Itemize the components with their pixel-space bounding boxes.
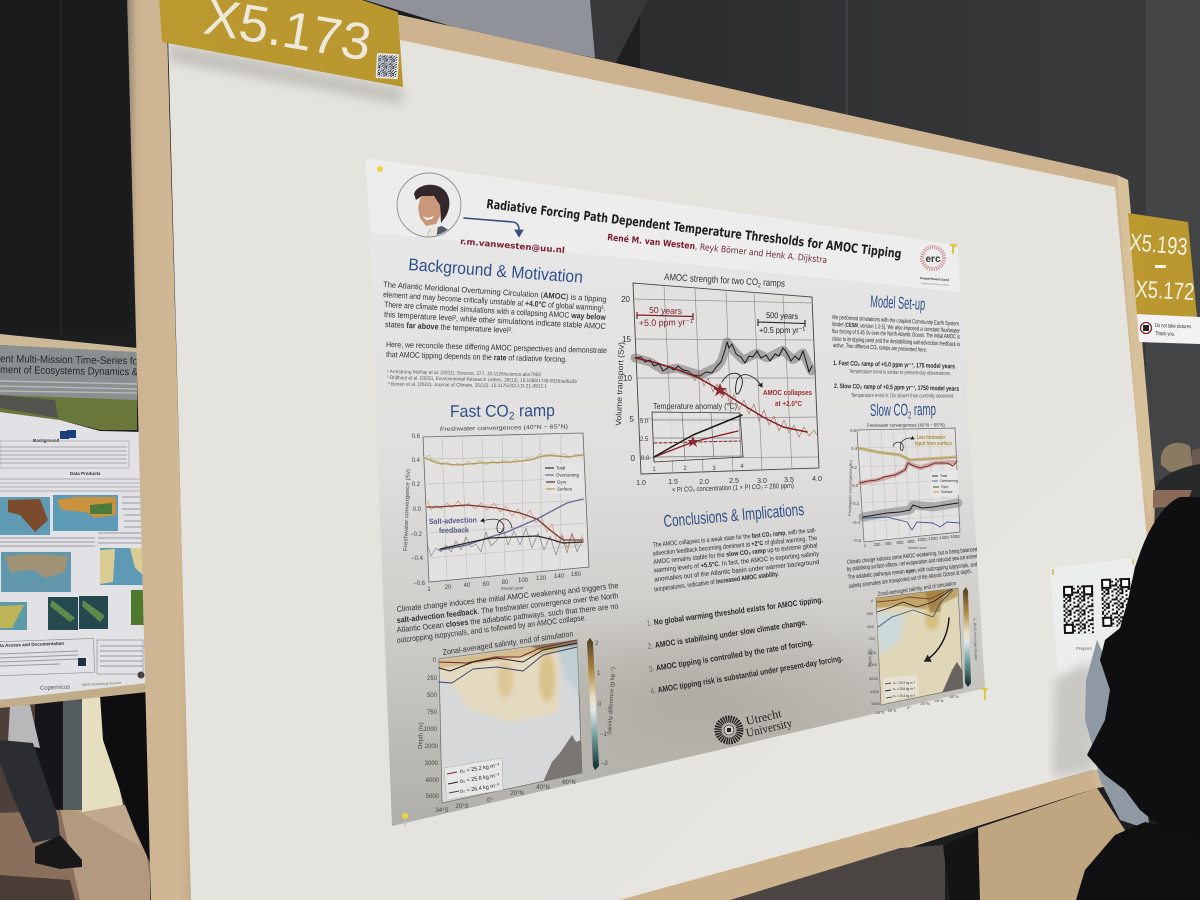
axis labels: 1600 — [950, 534, 960, 539]
axis labels — [848, 428, 960, 550]
axis labels: Freshwater convergence (Sv) — [403, 469, 412, 551]
callout: less freshwater input — [893, 435, 952, 451]
legend — [883, 675, 918, 702]
body text: that AMOC tipping depends on the rate of radiative forcing. — [386, 350, 567, 364]
panel: background and motivation — [383, 255, 608, 390]
panel: model set-up — [832, 292, 960, 400]
axis labels: 20°S — [888, 708, 897, 713]
axis labels: 20 — [445, 585, 452, 591]
axis labels: −0.2 — [851, 501, 860, 506]
body text: element and may become critically unstable at +4.0°C of global warming¹. — [383, 290, 606, 313]
sign shadow on board — [168, 42, 403, 105]
text block: salinity anomalies are transported out of the Atlantic Ocean at depth. — [849, 569, 973, 590]
axis labels: 750 — [427, 710, 438, 716]
visitor with long dark hair in foreground — [1076, 497, 1200, 900]
text block: Climate change induces some AMOC weakening, but is being balanced — [847, 547, 978, 566]
inset: temperature anomaly: 1 — [652, 467, 656, 473]
body text: this temperature level², while other simulations indicate stable AMOC — [384, 310, 606, 331]
500 years bracket — [758, 310, 805, 335]
authors: René M. van Westen, Reyk Börner and Henk A. Dijkstra — [607, 232, 828, 266]
axis labels: 0.0 — [413, 507, 422, 513]
axis labels: 140 — [554, 574, 565, 580]
ERC logo — [920, 247, 949, 287]
axis labels: 40°N — [935, 698, 944, 703]
heading: Background & Motivation — [408, 255, 584, 287]
axis labels: × PI CO₂ concentration (1 × PI CO₂ = 280 ppm) — [672, 483, 794, 494]
neighbouring poster board at left: ent Multi-Mission Time-Series fo — [0, 353, 138, 367]
axis labels: 5 — [630, 415, 635, 424]
chart: AMOC strength for two CO2 ramps — [614, 272, 822, 494]
references: ² Drijfhout et al. (2025), Environmental Research Letters, 20(12), 10.1088/1748-9326/ad6a3b — [387, 375, 577, 385]
data series — [635, 342, 818, 437]
chart: salinity section slow ramp: Zonal-averaged salinity, end of simulation — [877, 581, 957, 598]
legend: Gyre — [557, 480, 567, 484]
500 years bracket: 500 years — [766, 310, 798, 321]
neighbouring poster board at left: Background — [33, 438, 60, 443]
axis labels: −0.4 — [852, 520, 861, 525]
axis labels: 0.4 — [851, 446, 858, 451]
body text — [652, 527, 820, 593]
legend: Surface — [557, 486, 573, 492]
legend: Gyre — [941, 485, 948, 489]
ramp items — [833, 360, 959, 400]
inset: temperature anomaly: Temperature anomaly (°C) — [653, 402, 737, 411]
text block: outcropping isopycnals, and is followed by an AMOC collapse. — [396, 613, 587, 645]
500 years bracket: +0.5 ppm yr⁻¹ — [759, 325, 805, 335]
chart: freshwater convergences slow ramp — [848, 423, 960, 550]
visitor in background — [1153, 443, 1200, 508]
axis labels: 500 — [427, 693, 438, 699]
text block: The adiabatic pathways remain open, with outcropping isopycnals, and — [848, 562, 978, 581]
legend: σ₀ = 25.8 kg m⁻³ — [459, 773, 500, 785]
axis labels — [866, 598, 959, 715]
chart: salinity section slow ramp — [866, 581, 978, 715]
axis labels: 0.2 — [412, 482, 421, 488]
legend: σ₀ = 25.8 kg m⁻³ — [893, 687, 916, 691]
inset: temperature anomaly: 3 — [712, 466, 716, 472]
axis labels: 20°S — [455, 804, 469, 810]
body text: Here, we reconcile these differing AMOC perspectives and demonstrate — [386, 340, 608, 355]
key points: 4. AMOC tipping risk is substantial under present-day forcing. — [650, 654, 843, 696]
axis labels: 3.0 — [757, 478, 767, 485]
title: Radiative Forcing Path Dependent Temperature Thresholds for AMOC Tipping — [486, 196, 902, 261]
body text: flux forcing of 0.45 Sv over the North Atlantic Ocean. The initial AMOC is — [832, 329, 960, 341]
axis labels: 60 — [483, 582, 490, 588]
neighbouring board sign X5.193 - X5.172: Thank you. — [1155, 331, 1175, 338]
callout: salt-advection feedback: feedback — [439, 525, 470, 535]
bottom frame rail — [620, 770, 1097, 900]
colour bar: Salinity difference (g kg⁻¹) — [973, 618, 978, 660]
axis labels: Freshwater convergence (Sv) — [848, 459, 853, 516]
axis labels: 3.5 — [784, 477, 794, 484]
callout: salt-advection feedback: Salt-advection — [429, 515, 477, 526]
text block: salt-advection feedback. The freshwater convergence over the North — [396, 591, 619, 625]
axis labels: 400 — [884, 541, 892, 546]
legend: σ₀ = 26.4 kg m⁻³ — [459, 783, 500, 795]
ERC logo: European Research Council — [920, 276, 949, 282]
axis labels: 0 — [433, 658, 437, 664]
inset: temperature anomaly: 4 — [740, 464, 744, 470]
neighbouring board sign X5.193 - X5.172 — [1128, 213, 1200, 344]
key points: 3. AMOC tipping is controlled by the rate of forcing. — [648, 638, 814, 674]
text block: by stabilising surface effects: net evaporation and reduced sea-ice extent — [847, 554, 978, 573]
legend: Surface — [941, 490, 953, 494]
axis labels: 250 — [866, 611, 874, 616]
author portrait — [397, 173, 461, 240]
axis labels: 2000 — [868, 662, 878, 667]
axis labels: 1000 — [917, 537, 927, 542]
50 years bracket — [637, 305, 693, 328]
legend: Overturning — [556, 472, 579, 478]
yellow pins — [377, 166, 988, 826]
axis labels: 0.2 — [851, 465, 858, 470]
axis labels: −0.6 — [413, 581, 426, 587]
heading: Conclusions & Implications — [663, 500, 805, 531]
chart: salinity section fast ramp: Zonal-averaged salinity, end of simulation — [442, 629, 574, 657]
body text: warming levels of +5.5°C. In fact, the AMOC is exporting salinity — [653, 550, 820, 575]
axis labels: 20 — [621, 295, 631, 304]
body text: advection feedback becoming dominant at +2°C of global warming. The — [652, 534, 818, 557]
axis labels: Model year — [501, 585, 524, 591]
axis labels: 4000 — [870, 689, 880, 694]
chart title: AMOC strength for two CO2 ramps — [664, 272, 785, 291]
body text: anomalies out of the Atlantic basin under warmer background — [654, 559, 820, 583]
colour bar: 2 — [595, 641, 599, 647]
area below board with wooden panel — [730, 788, 1125, 900]
axis labels: 750 — [868, 636, 876, 641]
axis labels: Volume transport (Sv) — [614, 341, 626, 426]
axis labels: 0 — [631, 454, 636, 463]
axis labels: 600 — [896, 540, 904, 545]
axis labels: −0.4 — [411, 556, 424, 562]
axis labels: 20°N — [510, 791, 524, 797]
axis labels: 34°S — [876, 710, 885, 715]
ramp items: Temperature trend is 10x slower than currently observed. — [851, 393, 954, 400]
heading: Model Set-up — [870, 292, 926, 314]
body text: AMOC remains stable for the slow CO₂ ramp up to extreme global — [653, 542, 818, 566]
neighbouring poster board at left: Earth Monitoring Service — [82, 681, 121, 687]
50 years bracket: +5.0 ppm yr⁻¹ — [639, 317, 693, 328]
50 years bracket: 50 years — [649, 305, 683, 316]
key points: 1. No global warming threshold exists for AMOC tipping. — [646, 595, 824, 628]
ramp items: Temperature trend is similar to present-day observations. — [849, 369, 951, 377]
salt transport arrow — [925, 618, 949, 661]
axis labels: 15 — [622, 335, 632, 344]
key points — [646, 595, 843, 696]
colour bar: 1 — [597, 671, 601, 677]
axis labels: −0.2 — [410, 532, 423, 538]
colour bar: −2 — [601, 761, 609, 767]
axis labels — [403, 434, 582, 593]
email arrow — [464, 218, 519, 236]
axis labels: 3000 — [869, 676, 879, 681]
axis labels: 40°N — [536, 785, 550, 791]
axis labels: 1.0 — [636, 480, 646, 487]
text block: Climate change induces the initial AMOC weakening and triggers the — [396, 581, 619, 614]
inset: temperature anomaly: 0.0 — [641, 456, 650, 462]
axis labels: 0° — [487, 798, 493, 804]
colour bar: 0 — [598, 702, 602, 708]
ERC logo: Established by the European Commission — [921, 282, 949, 287]
axis labels: 20°N — [921, 701, 930, 706]
callout: less freshwater input: input from surface — [915, 441, 952, 447]
axis labels: 0 — [871, 598, 874, 603]
axis labels — [614, 295, 822, 494]
ramp items: 2. Slow CO₂ ramp of +0.5 ppm yr⁻¹, 1750 model years — [834, 383, 959, 393]
neighbouring poster board at left: ta Access and Documentation — [0, 641, 64, 648]
neighbouring poster board at left — [0, 334, 147, 708]
axis labels: 0° — [907, 705, 911, 710]
axis labels: 4.0 — [812, 476, 822, 483]
axis labels: 0.4 — [412, 458, 421, 464]
data lines — [425, 453, 583, 556]
Utrecht University logo: University — [745, 716, 793, 740]
legend: σ₀ = 25.2 kg m⁻³ — [893, 681, 916, 685]
axis labels: 1 — [427, 587, 431, 593]
axis labels: 160 — [571, 572, 582, 578]
text block — [847, 547, 978, 590]
chart: freshwater convergences fast ramp — [403, 424, 589, 593]
legend: σ₀ = 25.2 kg m⁻³ — [459, 763, 500, 775]
panel: fast CO2 ramp — [396, 401, 619, 814]
axis labels: 10 — [623, 374, 633, 383]
axis labels: 0.6 — [412, 434, 421, 440]
collapse marker star — [713, 383, 727, 396]
body text: The Atlantic Meridional Overturning Circulation (AMOC) is a tipping — [383, 280, 607, 304]
colour bar: −1 — [600, 732, 608, 738]
references: ³ Bonan et al. (2022), Journal of Climate, 35(15), 10.1175/JCLI-D-21-0912.1 — [388, 382, 547, 390]
axis labels: 80 — [502, 580, 509, 586]
axis labels: 200 — [874, 542, 881, 547]
axis labels: 60°N — [950, 694, 959, 699]
callout: salt-advection feedback — [429, 515, 512, 535]
heading: Slow CO2 ramp — [870, 400, 936, 421]
panel: slow CO2 ramp — [847, 400, 978, 715]
axis labels: 1000 — [424, 727, 438, 733]
axis labels: Depth (m) — [418, 722, 425, 749]
ERC logo: erc — [925, 254, 941, 265]
legend — [930, 470, 959, 497]
colour bar — [587, 638, 617, 770]
inset: temperature anomaly: 2 — [683, 466, 687, 472]
body text: The AMOC collapses to a weak state for the fast CO₂ ramp, with the salt- — [653, 527, 817, 549]
neighbouring poster board at left: ment of Ecosystems Dynamics & — [0, 364, 138, 378]
axis labels: 2.5 — [729, 478, 739, 485]
ramp items: 1. Fast CO₂ ramp of +5.0 ppm yr⁻¹, 175 model years — [833, 360, 955, 370]
legend: Overturning — [940, 479, 958, 483]
chart: salinity section fast ramp — [418, 629, 617, 814]
axis labels: 250 — [427, 676, 438, 682]
axis labels: 1200 — [928, 536, 938, 541]
callout: AMOC collapse: AMOC collapses — [763, 388, 812, 397]
colour bar: Salinity difference (g kg⁻¹) — [607, 667, 617, 735]
Utrecht University logo — [718, 706, 793, 741]
inset: temperature anomaly — [640, 402, 744, 473]
body text: states far above the temperature level³. — [385, 320, 513, 335]
legend — [444, 758, 503, 800]
body text: close to its tipping point and the destabilising salt-advection feedback is — [832, 337, 960, 348]
Utrecht University logo: Utrecht — [745, 706, 783, 728]
callout: AMOC collapse: at +2.0°C — [775, 399, 802, 408]
QR codes sheet: Preprint — [1076, 646, 1093, 651]
plot area — [633, 283, 819, 474]
key points: 2. AMOC is stabilising under slow climate change. — [647, 618, 807, 651]
callout: less freshwater input: Less freshwater — [917, 435, 945, 441]
references: ¹ Armstrong McKay et al. (2022), Science, 377, 10.1126/science.abn7950 — [387, 369, 541, 378]
body text — [832, 315, 960, 354]
chart: freshwater convergences slow ramp: Freshwater convergences (40°N − 65°N) — [867, 423, 945, 429]
neighbouring poster board at left: Copernicus — [40, 684, 70, 692]
body text: active. Two different CO₂ ramps are presented here: — [833, 343, 927, 354]
axis labels: 800 — [908, 539, 915, 544]
legend: σ₀ = 26.4 kg m⁻³ — [893, 694, 916, 698]
email address: r.m.vanwesten@uu.nl — [460, 236, 565, 255]
axis labels: 120 — [536, 576, 547, 582]
body text: There are climate model simulations with a collapsing AMOC way below — [384, 300, 607, 322]
axis labels — [418, 658, 576, 814]
inset: temperature anomaly: 2.5 — [640, 437, 649, 443]
axis labels: 5000 — [871, 701, 881, 706]
axis labels: 2.0 — [699, 479, 709, 486]
body text: temperatures, indicative of increased AMOC stability. — [654, 571, 780, 593]
board number sign X5.173 — [159, 0, 403, 87]
axis labels: 3000 — [425, 761, 439, 767]
header — [397, 173, 949, 287]
panel: conclusions and implications — [646, 500, 843, 741]
legend: Total — [556, 466, 565, 470]
axis labels: 1000 — [867, 650, 877, 655]
axis labels: Depth (m) — [867, 648, 873, 667]
axis labels: 0.6 — [850, 428, 857, 433]
axis labels: 4000 — [426, 778, 440, 784]
axis labels: 0.0 — [852, 483, 859, 488]
wall shadow beside visitor — [1052, 660, 1095, 778]
chart: freshwater convergences fast ramp: Freshwater convergences (40°N − 65°N) — [440, 424, 568, 433]
axis labels: 1400 — [939, 535, 949, 540]
axis labels: 40 — [464, 583, 471, 589]
axis labels: 100 — [518, 578, 529, 584]
legend: Total — [940, 474, 947, 478]
axis labels: 1 — [864, 543, 867, 548]
QR codes sheet — [1050, 558, 1140, 675]
text block: Atlantic Ocean closes the adiabatic pathways, such that there are no — [396, 601, 619, 634]
references — [387, 369, 577, 390]
callout: AMOC collapse — [722, 373, 812, 408]
text block — [396, 581, 619, 645]
axis labels: 2000 — [425, 744, 439, 750]
heading: Fast CO2 ramp — [450, 401, 555, 423]
body text — [383, 280, 608, 364]
axis labels: 5000 — [426, 794, 440, 800]
inset: temperature anomaly: 5.0 — [640, 419, 649, 425]
axis labels: 1.5 — [668, 479, 678, 486]
data lines — [858, 448, 960, 530]
axis labels: Model year — [908, 546, 928, 550]
axis labels: 34°S — [435, 808, 449, 814]
main poster sheet — [366, 158, 985, 826]
axis labels: 60°N — [562, 780, 576, 786]
axis labels: 500 — [867, 624, 875, 629]
legend — [543, 463, 584, 494]
axis labels: −0.6 — [853, 538, 862, 543]
body text: We performed simulations with the coupled Community Earth System — [832, 315, 959, 328]
body text: Model (CESM, version 1.0.5). We also imposed a constant freshwater — [832, 322, 960, 335]
neighbouring poster board at left: Data Products — [70, 471, 101, 476]
